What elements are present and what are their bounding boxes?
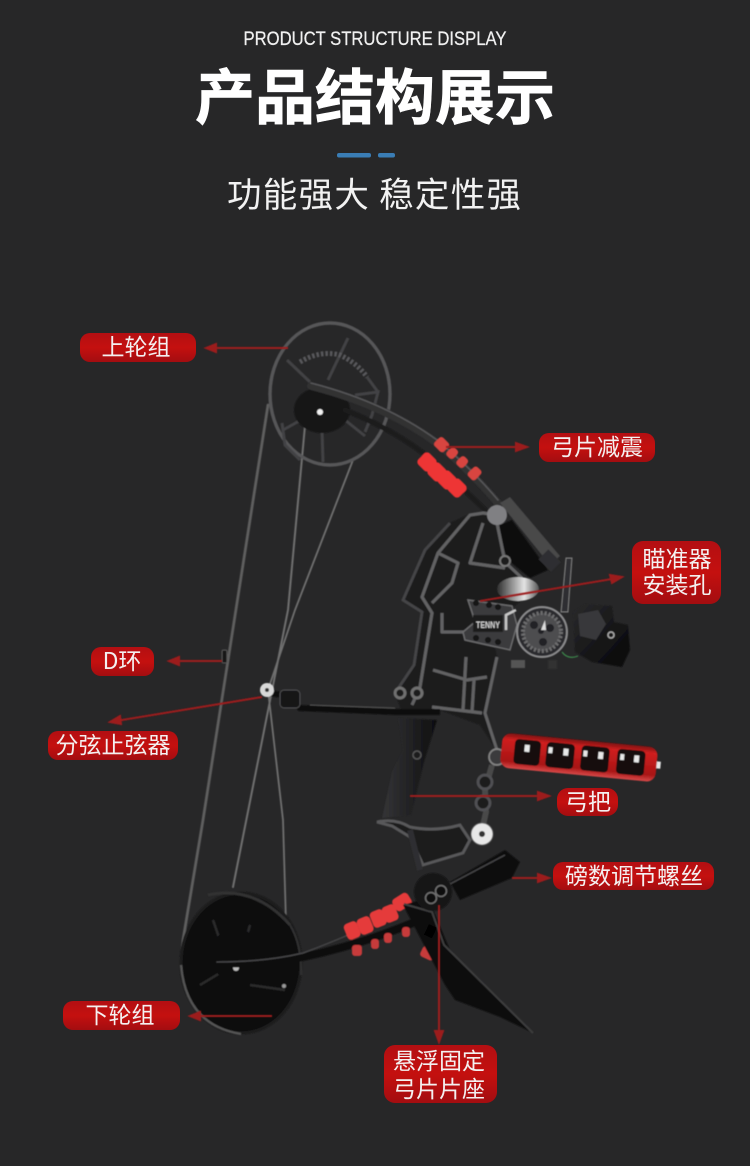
- stabilizer: [500, 733, 662, 783]
- silver ball: [497, 577, 539, 601]
- sight dial: [517, 607, 567, 657]
- sight clip and knobs: [506, 610, 516, 630]
- arrow: D loop: [169, 657, 222, 665]
- title: 产品结构展示: [195, 50, 555, 137]
- label: floating limb pocket: 弓片片座: [393, 1070, 485, 1104]
- arrow: poundage screw: [512, 874, 549, 882]
- arrow: sight mount: [480, 575, 622, 601]
- mount brand mark: [473, 615, 503, 632]
- label: floating limb pocket: [384, 1042, 497, 1104]
- lower limb dampers: [343, 891, 436, 961]
- bowstring and cables: [181, 393, 353, 962]
- sight assembly: TENNY: [476, 620, 500, 631]
- D loop: [222, 650, 227, 663]
- upper cam: [270, 323, 390, 465]
- cam hub: [294, 387, 350, 433]
- subtitle: 功能强大 稳定性强: [227, 167, 521, 217]
- sight mount plate: [463, 600, 517, 650]
- cable guard rod: [260, 683, 440, 712]
- label: lower cam group: [63, 996, 180, 1030]
- label: lower cam group: 下轮组: [86, 996, 154, 1030]
- riser pivots: [395, 505, 510, 765]
- upper limb dampers: [416, 436, 483, 499]
- label: poundage screw: 磅数调节螺丝: [565, 857, 703, 891]
- english subtitle: PRODUCT STRUCTURE DISPLAY: [244, 29, 507, 50]
- riser frame: [395, 505, 522, 765]
- arrow: limb pocket: [435, 905, 443, 1042]
- header: [195, 29, 555, 217]
- label: floating limb pocket: 悬浮固定: [393, 1042, 485, 1076]
- arrow: string splitter: [110, 697, 262, 724]
- lower riser: [377, 765, 493, 870]
- lower cam: [181, 893, 301, 1034]
- label: D loop: [91, 642, 154, 676]
- compound bow: [181, 323, 662, 1034]
- label: upper cam group: 上轮组: [102, 328, 170, 362]
- accent bars: [337, 153, 395, 158]
- label: limb damper: 弓片减震: [551, 428, 643, 462]
- lower limb pocket: [403, 850, 533, 1033]
- grip: [382, 718, 437, 818]
- lower limb: [217, 922, 415, 963]
- arrow: upper cam: [206, 344, 288, 352]
- label: D loop: D环: [103, 642, 141, 676]
- arrow: lower cam: [190, 1012, 272, 1020]
- sight bar: [561, 558, 572, 612]
- scope body: [573, 604, 630, 667]
- grip screw: [413, 751, 421, 759]
- hinge bolts: [414, 873, 452, 911]
- chain track: [300, 354, 367, 377]
- arrow: grip: [410, 792, 549, 800]
- callout arrows: [110, 344, 622, 1042]
- label: sight mount hole: 安装孔: [642, 566, 712, 600]
- label: string splitter: 分弦止弦器: [56, 726, 170, 760]
- arrow: limb damper: [446, 443, 527, 451]
- label: grip: 弓把: [565, 783, 611, 817]
- label: sight mount hole: 瞄准器: [642, 540, 712, 574]
- white knob: [471, 823, 493, 845]
- upper limb: [311, 383, 498, 511]
- label: sight mount hole: [632, 540, 721, 604]
- label: upper cam group: [80, 328, 196, 362]
- riser outer shell: [395, 523, 450, 693]
- upper limb pocket: [495, 497, 561, 578]
- sight assembly: [463, 558, 630, 669]
